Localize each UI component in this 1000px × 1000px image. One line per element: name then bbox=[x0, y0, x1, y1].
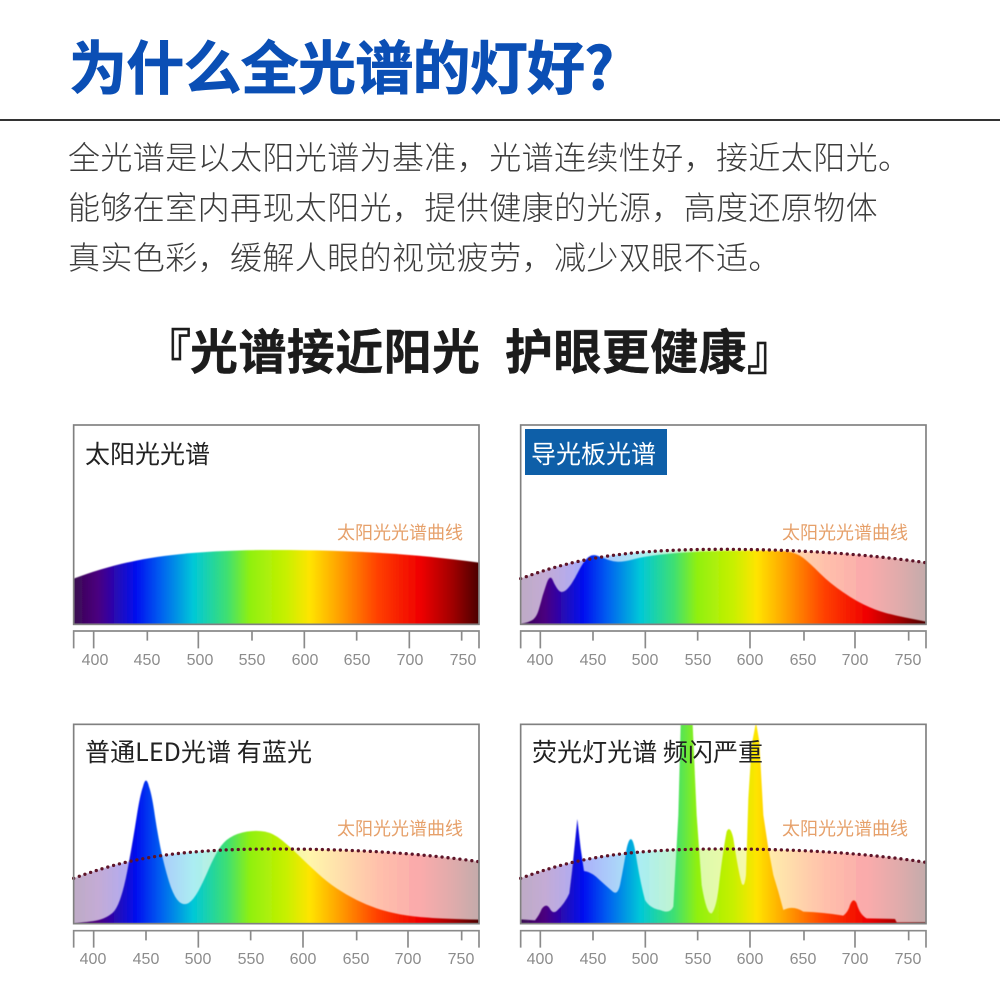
section heading: 光谱接近阳光 bbox=[190, 313, 480, 383]
wavelength axis labels: 550 bbox=[685, 951, 711, 968]
wavelength axis labels: 550 bbox=[239, 652, 265, 669]
spectrum fill: fluorescent bbox=[521, 724, 926, 924]
wavelength axis labels: 700 bbox=[397, 652, 423, 669]
curve label: 太阳光光谱曲线 bbox=[337, 519, 463, 545]
wavelength axis labels: 650 bbox=[344, 652, 370, 669]
spectrum fill: sunlight bbox=[74, 547, 479, 625]
wavelength axis labels: 700 bbox=[842, 951, 868, 968]
wavelength axis labels: 450 bbox=[133, 951, 159, 968]
wavelength axis labels bbox=[82, 652, 476, 669]
wavelength axis labels: 750 bbox=[895, 951, 921, 968]
wavelength axis labels: 500 bbox=[632, 951, 658, 968]
panel: ordinary LED spectrum bbox=[74, 724, 479, 968]
wavelength axis labels: 600 bbox=[737, 951, 763, 968]
wavelength axis labels: 500 bbox=[185, 951, 211, 968]
wavelength axis labels: 450 bbox=[580, 652, 606, 669]
wavelength axis labels: 600 bbox=[292, 652, 318, 669]
intro text block bbox=[68, 133, 910, 279]
intro text block: 真实色彩，缓解人眼的视觉疲劳，减少双眼不适。 bbox=[68, 233, 781, 279]
wavelength axis labels: 600 bbox=[290, 951, 316, 968]
section heading: 护眼更健康』 bbox=[505, 313, 795, 383]
wavelength axis labels: 400 bbox=[80, 951, 106, 968]
curve label: 太阳光光谱曲线 bbox=[782, 519, 908, 545]
wavelength axis labels: 600 bbox=[737, 652, 763, 669]
curve label: 太阳光光谱曲线 bbox=[782, 815, 908, 841]
wavelength axis labels: 700 bbox=[842, 652, 868, 669]
curve label: 太阳光光谱曲线 bbox=[337, 815, 463, 841]
panel label: 普通LED光谱 有蓝光 bbox=[85, 733, 312, 769]
wavelength axis labels: 500 bbox=[187, 652, 213, 669]
wavelength axis labels: 550 bbox=[238, 951, 264, 968]
wavelength axis labels: 450 bbox=[134, 652, 160, 669]
intro text block: 全光谱是以太阳光谱为基准，光谱连续性好，接近太阳光。 bbox=[68, 133, 910, 179]
spectrum fill: LED bbox=[74, 780, 478, 923]
wavelength axis labels: 400 bbox=[527, 652, 553, 669]
wavelength axis labels: 650 bbox=[343, 951, 369, 968]
section heading: 『 bbox=[143, 313, 191, 383]
wavelength axis labels: 750 bbox=[450, 652, 476, 669]
panel label badge bbox=[525, 429, 667, 475]
panel label badge: 导光板光谱 bbox=[531, 435, 656, 471]
panel: light guide plate spectrum bbox=[521, 425, 926, 669]
wavelength axis labels: 500 bbox=[632, 652, 658, 669]
header rule bbox=[0, 119, 1000, 121]
panel label: 荧光灯光谱 频闪严重 bbox=[532, 733, 763, 769]
panel: sunlight spectrum bbox=[74, 425, 479, 669]
spectrum fill: light guide plate bbox=[521, 547, 926, 625]
wavelength axis labels: 400 bbox=[527, 951, 553, 968]
panel label: 太阳光光谱 bbox=[85, 435, 210, 471]
wavelength axis labels: 700 bbox=[395, 951, 421, 968]
wavelength axis labels bbox=[527, 652, 921, 669]
title: 为什么全光谱的灯好? bbox=[69, 22, 614, 106]
wavelength axis labels: 400 bbox=[82, 652, 108, 669]
wavelength axis labels: 750 bbox=[448, 951, 474, 968]
wavelength axis labels: 650 bbox=[790, 652, 816, 669]
wavelength axis labels bbox=[80, 951, 474, 968]
panel: fluorescent spectrum bbox=[521, 724, 926, 968]
wavelength axis labels: 750 bbox=[895, 652, 921, 669]
wavelength axis labels bbox=[527, 951, 921, 968]
wavelength axis labels: 550 bbox=[685, 652, 711, 669]
wavelength axis labels: 450 bbox=[580, 951, 606, 968]
wavelength axis labels: 650 bbox=[790, 951, 816, 968]
intro text block: 能够在室内再现太阳光，提供健康的光源，高度还原物体 bbox=[68, 183, 878, 229]
